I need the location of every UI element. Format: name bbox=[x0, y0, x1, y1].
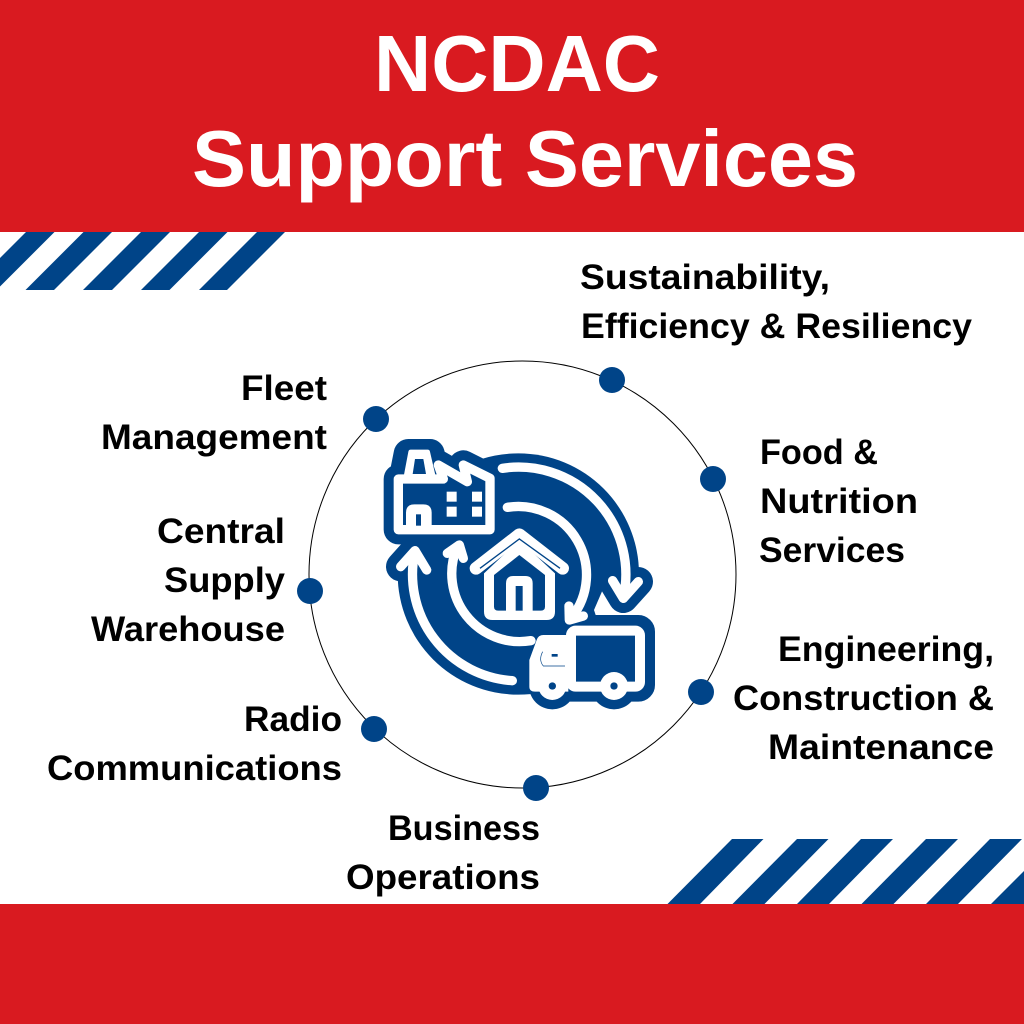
label: food and nutrition bbox=[759, 433, 918, 570]
label: engineering: Construction & bbox=[733, 679, 994, 718]
label: radio communications bbox=[47, 700, 342, 788]
label: engineering bbox=[733, 630, 994, 767]
label: fleet management: Management bbox=[101, 418, 327, 457]
ring bbox=[309, 361, 736, 788]
inner counter-clockwise arrow bbox=[447, 545, 531, 642]
node dots bbox=[297, 367, 726, 801]
label: business operations: Operations bbox=[346, 858, 540, 897]
bottom-right stripes bbox=[668, 839, 1024, 904]
truck bbox=[529, 631, 640, 700]
label: food and nutrition: Services bbox=[759, 531, 905, 570]
outer clockwise arrow bbox=[502, 467, 638, 598]
title: Support Services bbox=[192, 114, 858, 203]
label: engineering: Engineering, bbox=[778, 630, 994, 669]
label: food and nutrition: Food & bbox=[760, 433, 878, 472]
label: food and nutrition: Nutrition bbox=[760, 482, 918, 521]
header band bbox=[0, 0, 1024, 232]
label: central supply warehouse: Supply bbox=[164, 561, 286, 600]
label: radio communications: Communications bbox=[47, 749, 342, 788]
outer counter-clockwise arrow bbox=[401, 551, 512, 681]
label: sustainability bbox=[580, 258, 973, 346]
label: central supply warehouse: Central bbox=[157, 512, 285, 551]
icon: factory, house and truck with cycle arrows bbox=[398, 452, 660, 709]
top-left stripes bbox=[0, 232, 285, 290]
label: central supply warehouse bbox=[91, 512, 286, 649]
label: business operations bbox=[346, 809, 540, 897]
label: business operations: Business bbox=[388, 809, 540, 848]
label: central supply warehouse: Warehouse bbox=[91, 610, 285, 649]
icon background disc bbox=[398, 453, 639, 695]
title: NCDAC bbox=[374, 19, 660, 108]
title bbox=[192, 19, 858, 203]
house bbox=[476, 535, 563, 620]
label: sustainability: Efficiency & Resiliency bbox=[581, 307, 973, 346]
blue outlines of factory, arrowheads and truck bbox=[398, 454, 645, 709]
label: engineering: Maintenance bbox=[768, 728, 994, 767]
factory bbox=[398, 452, 490, 530]
inner clockwise arrow bbox=[507, 506, 587, 620]
label: fleet management bbox=[101, 369, 327, 457]
label: radio communications: Radio bbox=[244, 700, 342, 739]
label: fleet management: Fleet bbox=[241, 369, 327, 408]
label: sustainability: Sustainability, bbox=[580, 258, 830, 297]
footer band bbox=[0, 904, 1024, 1024]
